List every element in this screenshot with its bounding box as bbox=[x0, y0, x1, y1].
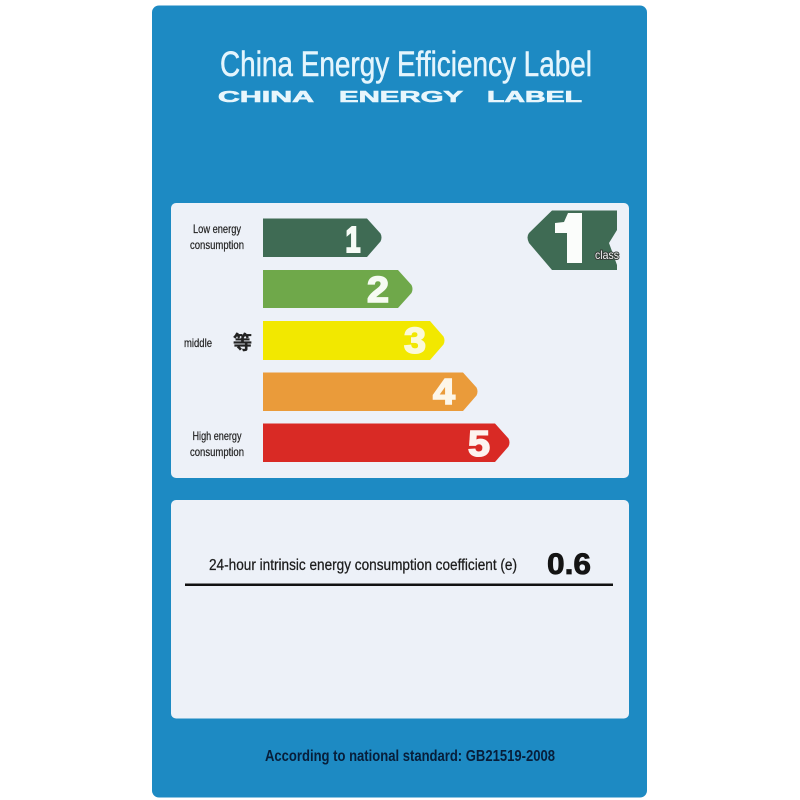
label: high energy consumption: consumption bbox=[190, 445, 244, 459]
coefficient label: 24-hour intrinsic energy consumption coefficient (e) bbox=[209, 557, 517, 574]
grade bar 5 bbox=[263, 423, 510, 464]
label: low energy consumption bbox=[190, 222, 244, 252]
label: low energy consumption: Low energy bbox=[193, 222, 241, 236]
grade bar 5: 5 bbox=[468, 423, 490, 464]
current grade badge bbox=[528, 210, 619, 270]
label: low energy consumption: consumption bbox=[190, 238, 244, 252]
coefficient value: 0.6 bbox=[547, 548, 591, 581]
label: high energy consumption bbox=[190, 429, 244, 459]
subtitle: LABEL bbox=[487, 89, 582, 106]
panel: energy coefficient bbox=[171, 500, 629, 718]
subtitle: ENERGY bbox=[339, 89, 464, 106]
grade bar 3: 3 bbox=[404, 320, 426, 361]
grade bar 2 bbox=[263, 269, 412, 310]
grade bar 4: 4 bbox=[433, 371, 455, 412]
label: high energy consumption: High energy bbox=[192, 429, 242, 443]
label: chinese character middle grade: 等 bbox=[233, 332, 252, 354]
label: middle: middle bbox=[184, 336, 212, 350]
panel: energy grade scale bbox=[171, 203, 629, 478]
grade bar 2: 2 bbox=[367, 269, 389, 310]
grade bar 3 bbox=[263, 320, 444, 361]
grade bar 1: 1 bbox=[346, 219, 360, 260]
panel: blue label background bbox=[152, 6, 647, 798]
subtitle bbox=[218, 89, 582, 106]
grade bar 4 bbox=[263, 371, 478, 412]
badge label: class: class bbox=[595, 248, 619, 262]
footer: national standard: According to national standard: GB21519-2008 bbox=[265, 748, 555, 765]
grade bar 1 bbox=[263, 218, 382, 260]
subtitle: CHINA bbox=[218, 89, 314, 106]
title: China Energy Efficiency Label bbox=[220, 45, 592, 84]
